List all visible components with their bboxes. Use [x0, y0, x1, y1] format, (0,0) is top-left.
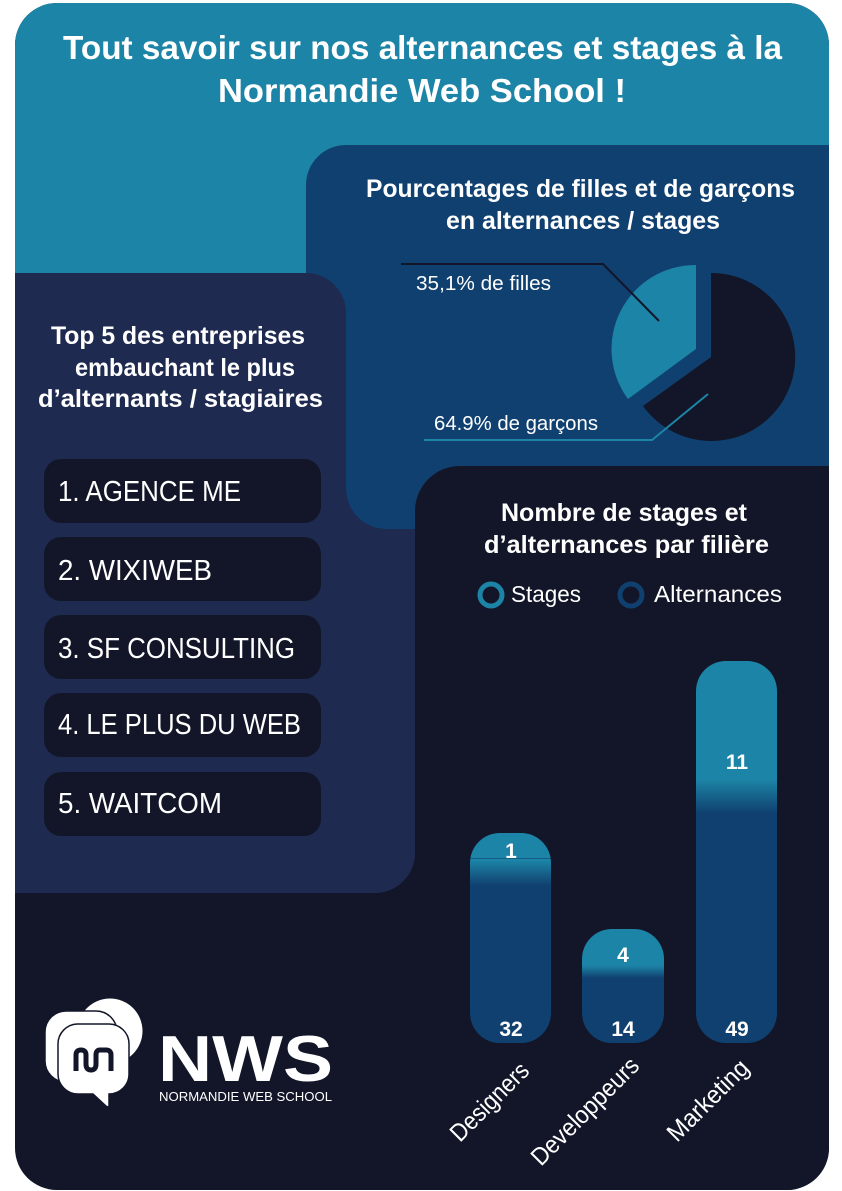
- bar: marketing: [661, 661, 777, 1147]
- legend: Alternances: [654, 581, 782, 607]
- bar: marketing: Marketing: [661, 1054, 755, 1147]
- legend: [480, 581, 782, 607]
- logo wordmark: NORMANDIE WEB SCHOOL: [159, 1089, 332, 1104]
- ranking item 2: 2. WIXIWEB: [58, 555, 212, 587]
- ranking item 3: [44, 615, 321, 679]
- bar: designers: 32: [499, 1018, 523, 1041]
- bar chart heading: Nombre de stages et: [501, 499, 748, 527]
- pie heading: [366, 175, 795, 235]
- logo wordmark: NWS: [158, 1022, 333, 1095]
- bar: designers: [444, 833, 551, 1147]
- top 5 heading: Top 5 des entreprises: [51, 322, 305, 350]
- callout: girls: 35,1% de filles: [416, 273, 551, 295]
- ranking item 1: [44, 459, 321, 523]
- ranking item 5: [44, 772, 321, 836]
- bar chart heading: [484, 499, 769, 559]
- legend: Stages: [511, 581, 581, 607]
- bar: designers: Designers: [444, 1057, 535, 1147]
- callout: boys: [424, 394, 708, 440]
- icon: speech bubbles: [45, 998, 142, 1107]
- panel: gender percentages: [306, 145, 829, 529]
- title: Tout savoir sur nos alternances et stages à la: [63, 29, 783, 66]
- pie heading: en alternances / stages: [446, 207, 720, 235]
- title: Normandie Web School !: [218, 72, 626, 109]
- panel: top 5 companies: [15, 273, 415, 893]
- bar chart heading: d’alternances par filière: [484, 531, 769, 559]
- panel: bar chart: [415, 466, 829, 1190]
- top 5 heading: embauchant le plus: [75, 354, 295, 382]
- ranking item 4: [44, 693, 321, 757]
- bar: designers: 1: [505, 840, 517, 863]
- top 5 heading: d’alternants / stagiaires: [38, 385, 323, 413]
- header panel: [15, 3, 829, 320]
- pie chart: [611, 265, 795, 441]
- ranking item 1: 1. AGENCE ME: [58, 476, 241, 508]
- bar: marketing: 49: [725, 1018, 749, 1041]
- bar: developers: 14: [611, 1018, 635, 1041]
- title: [63, 29, 783, 109]
- top 5 heading: [38, 322, 323, 413]
- ranking item 2: [44, 537, 321, 601]
- bar: marketing: 11: [726, 751, 748, 774]
- callout: girls: [401, 264, 659, 321]
- bar: developers: 4: [617, 944, 629, 967]
- ranking item 5: 5. WAITCOM: [58, 788, 222, 820]
- ranking item 3: 3. SF CONSULTING: [58, 633, 295, 665]
- bar: developers: Developpeurs: [525, 1052, 645, 1171]
- logo: [45, 998, 333, 1107]
- ranking item 4: 4. LE PLUS DU WEB: [58, 709, 301, 741]
- callout: boys: 64.9% de garçons: [434, 413, 598, 435]
- bar: developers: [525, 929, 664, 1171]
- pie heading: Pourcentages de filles et de garçons: [366, 175, 795, 203]
